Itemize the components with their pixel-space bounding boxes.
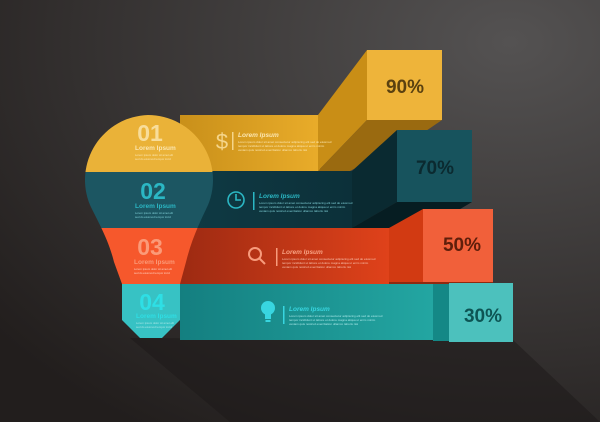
text block 3 bbox=[276, 248, 376, 269]
text block 2 bbox=[253, 192, 353, 213]
step 03: Lorem Ipsum bbox=[134, 259, 175, 266]
icon: light bulb bbox=[261, 301, 275, 322]
step 01: sed do eiusmod tempor incid bbox=[135, 157, 171, 161]
text block 4: Lorem ipsum dolor sit amet consectetur adipiscing elit sed do eiusmod bbox=[289, 314, 383, 318]
text block 4 bbox=[283, 306, 383, 326]
step 03: Lorem ipsum dolor sit amet elit bbox=[134, 267, 172, 271]
text block 1 bbox=[232, 132, 332, 152]
label 70%: 70% bbox=[416, 158, 454, 179]
light bulb shape bbox=[85, 115, 213, 338]
step 04: 04 bbox=[139, 289, 165, 315]
step 01: 01 bbox=[137, 120, 163, 146]
step 04: Lorem Ipsum bbox=[136, 313, 177, 320]
text block 4: Lorem Ipsum bbox=[289, 306, 330, 313]
step 01: Lorem ipsum dolor sit amet elit bbox=[135, 153, 173, 157]
text block 2: veniam quis nostrud exercitation ullamco laboris nisi bbox=[259, 209, 329, 213]
text block 2: tempor incididunt ut labore et dolore magna aliqua ut enim minim bbox=[259, 205, 346, 209]
text block 2: Lorem Ipsum bbox=[259, 193, 300, 200]
step 02 bbox=[135, 178, 176, 219]
icon: clock bbox=[228, 192, 244, 208]
step 03 bbox=[134, 234, 175, 275]
icon: dollar: $ bbox=[216, 129, 228, 154]
step 02: 02 bbox=[140, 178, 166, 204]
bar 1: yellow 90% bbox=[180, 50, 442, 171]
text block 4: veniam quis nostrud exercitation ullamco laboris nisi bbox=[289, 322, 359, 326]
text block 1: veniam quis nostrud exercitation ullamco laboris nisi bbox=[238, 148, 308, 152]
text block 3: Lorem Ipsum bbox=[282, 249, 323, 256]
text block 1: Lorem ipsum dolor sit amet consectetur adipiscing elit sed do eiusmod bbox=[238, 140, 332, 144]
step 04 bbox=[136, 289, 177, 329]
text block 2: Lorem ipsum dolor sit amet consectetur adipiscing elit sed do eiusmod bbox=[259, 201, 353, 205]
step 03: 03 bbox=[137, 234, 163, 260]
label 30%: 30% bbox=[464, 306, 502, 327]
step 02: Lorem ipsum dolor sit amet elit bbox=[135, 211, 173, 215]
bar 2: dark teal 70% bbox=[180, 130, 472, 228]
step 02: Lorem Ipsum bbox=[135, 203, 176, 210]
step 04: Lorem ipsum dolor sit amet elit bbox=[136, 321, 174, 325]
label 90%: 90% bbox=[386, 77, 424, 98]
text block 3: Lorem ipsum dolor sit amet consectetur adipiscing elit sed do eiusmod bbox=[282, 257, 376, 261]
text block 3: tempor incididunt ut labore et dolore magna aliqua ut enim minim bbox=[282, 261, 369, 265]
step 03: sed do eiusmod tempor incid bbox=[134, 271, 170, 275]
bar 3: orange 50% bbox=[180, 209, 493, 285]
step 02: sed do eiusmod tempor incid bbox=[135, 215, 171, 219]
text block 4: tempor incididunt ut labore et dolore magna aliqua ut enim minim bbox=[289, 318, 376, 322]
text block 3: veniam quis nostrud exercitation ullamco laboris nisi bbox=[282, 265, 352, 269]
bar 4: teal 30% bbox=[180, 283, 513, 342]
text block 1: tempor incididunt ut labore et dolore magna aliqua ut enim minim bbox=[238, 144, 325, 148]
shadow bbox=[130, 338, 600, 422]
step 04: sed do eiusmod tempor incid bbox=[136, 325, 172, 329]
icon: magnifier bbox=[249, 248, 265, 264]
text block 1: Lorem Ipsum bbox=[238, 132, 279, 139]
step 01: Lorem Ipsum bbox=[135, 145, 176, 152]
step 01 bbox=[135, 120, 176, 161]
label 50%: 50% bbox=[443, 235, 481, 256]
